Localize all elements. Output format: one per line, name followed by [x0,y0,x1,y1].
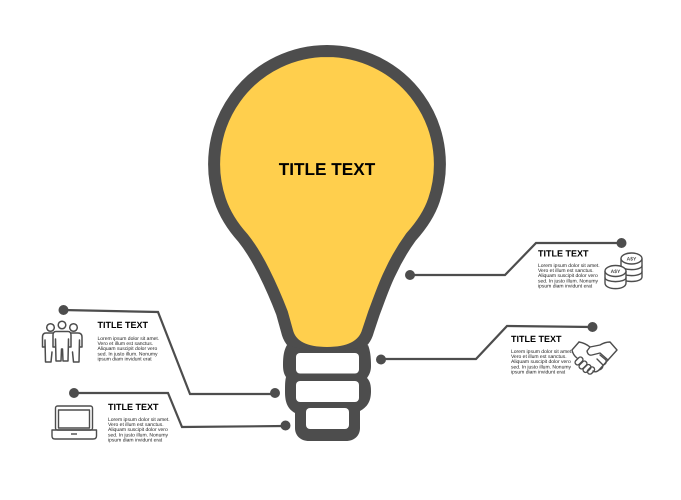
text block: coins: Lorem ipsum dolor sit amet. [538,263,600,269]
text block: laptop: Lorem ipsum dolor sit amet. [108,417,170,423]
text block: laptop: sed. In justo illum. Nonumy [108,432,169,438]
icon: laptop [52,406,96,439]
connector: laptop [69,388,290,430]
text block: coins: TITLE TEXT [538,248,589,258]
connector: coins [405,238,626,280]
text block: people: Aliquam suscipit dolor vero [98,346,157,352]
text block: people: TITLE TEXT [98,320,148,330]
bulb glass [214,51,440,353]
base slot 2 [296,381,359,402]
light bulb [214,51,440,441]
text block: people: sed. In justo illum. Nonumy [98,351,158,357]
title: TITLE TEXT [279,159,376,179]
icon: people [42,321,82,362]
text block: coins: Aliquam suscipit dolor vero [538,273,598,279]
connector: handshake [376,322,598,364]
text block: coins: sed. In justo illum. Nonumy [538,278,599,284]
base slot 1 [296,353,359,374]
text block: laptop: TITLE TEXT [108,402,159,412]
base slot 3 [306,408,349,429]
text block: coins: ipsum diam invidunt erat [538,283,593,289]
text block: handshake: Vero et illum est sanctus. [511,354,567,360]
text block: people: Lorem ipsum dolor sit amet. [98,336,159,342]
text block: people: ipsum diam invidunt erat [98,356,152,362]
text block: laptop: ipsum diam invidunt erat [108,437,163,443]
text block: handshake: Aliquam suscipit dolor vero [511,359,571,365]
text block: laptop [108,402,170,443]
icon: coins: A$Y [627,256,637,262]
connector: people [58,305,280,398]
text block: handshake: Lorem ipsum dolor sit amet. [511,349,573,355]
text block: people: Vero et illum est sanctus. [98,341,153,347]
text block: handshake: ipsum diam invidunt erat [511,369,566,375]
text block: handshake: sed. In justo illum. Nonumy [511,364,572,370]
text block: handshake: TITLE TEXT [511,334,562,344]
icon: handshake [572,342,617,375]
text block: people [98,320,159,362]
icon: coins: A$Y [611,269,621,275]
text block: laptop: Vero et illum est sanctus. [108,422,164,428]
text block: handshake [511,334,573,375]
text block: coins: Vero et illum est sanctus. [538,268,594,274]
bulb base [283,345,371,441]
text block: laptop: Aliquam suscipit dolor vero [108,427,168,433]
icon: coins [605,253,642,289]
text block: coins [538,248,600,289]
